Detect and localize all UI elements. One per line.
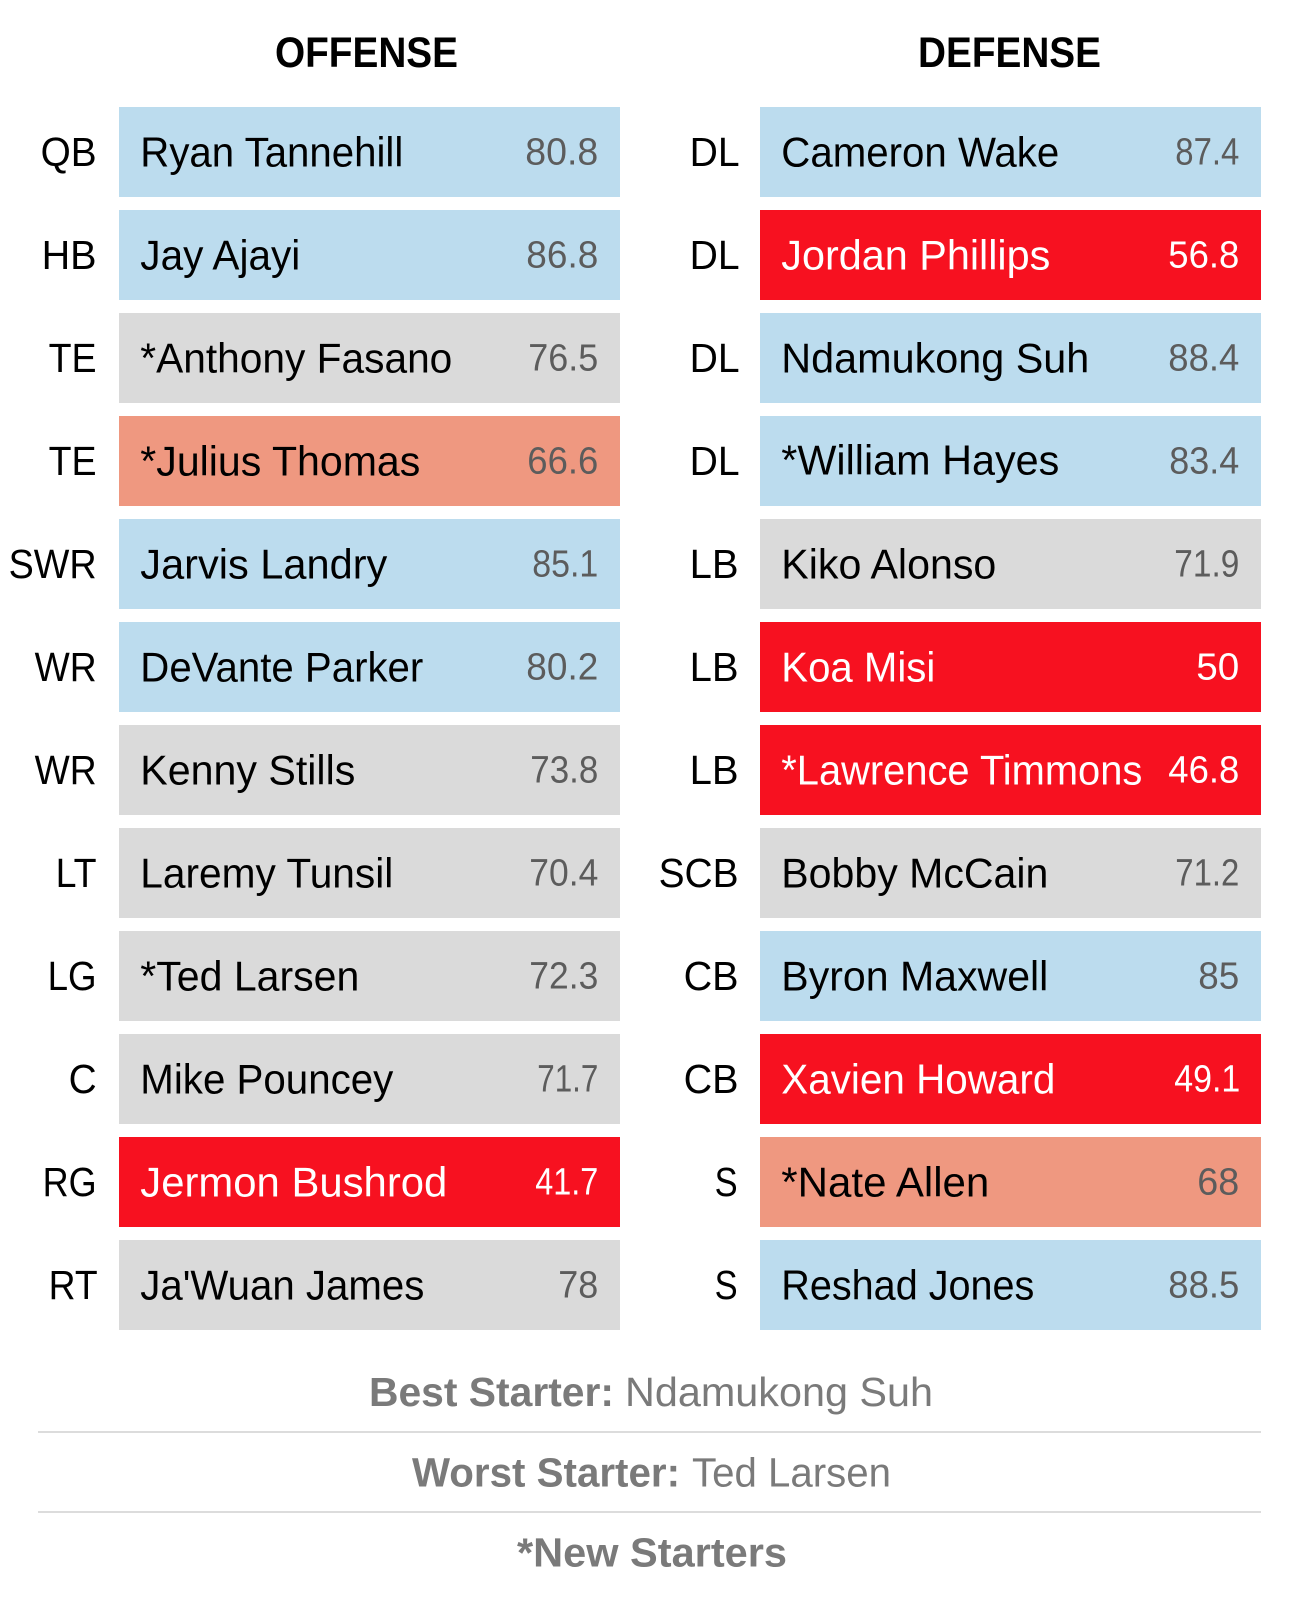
text: worst starter	[412, 1450, 891, 1496]
row: DL Jordan Phillips: 56.8	[1168, 235, 1239, 277]
row: SCB Bobby McCain: Bobby McCain	[781, 850, 1048, 896]
row: RG Jermon Bushrod	[43, 1137, 620, 1227]
row: HB Jay Ajayi	[42, 210, 620, 300]
row: WR Kenny Stills	[35, 725, 620, 815]
row: LB Lawrence Timmons: 46.8	[1168, 750, 1239, 792]
row: LB Koa Misi: Koa Misi	[781, 644, 935, 690]
row: DL Ndamukong Suh: 88.4	[1168, 338, 1239, 380]
row: DL William Hayes	[690, 416, 1261, 506]
row: DL Cameron Wake: Cameron Wake	[781, 128, 1059, 176]
row: LT Laremy Tunsil	[56, 828, 620, 918]
row: S Nate Allen	[715, 1137, 1261, 1227]
row: RT Ja'Wuan James	[49, 1240, 620, 1330]
row: LB Lawrence Timmons	[690, 725, 1261, 815]
row: RG Jermon Bushrod: RG	[43, 1159, 97, 1205]
row: WR DeVante Parker: 80.2	[526, 647, 598, 689]
row: DL William Hayes: *William Hayes	[781, 436, 1059, 484]
row: LB Lawrence Timmons: LB	[690, 747, 739, 793]
row: TE Julius Thomas: *Julius Thomas	[140, 438, 420, 484]
row: RG Jermon Bushrod: Jermon Bushrod	[140, 1158, 447, 1206]
row: LB Koa Misi: LB	[690, 644, 739, 690]
row: DL Jordan Phillips	[690, 210, 1261, 300]
row: S Nate Allen: *Nate Allen	[781, 1158, 989, 1206]
row: DL Jordan Phillips: DL	[690, 232, 740, 278]
row: S Nate Allen: S	[715, 1159, 738, 1205]
heading: offense: OFFENSE	[275, 29, 458, 77]
row: WR DeVante Parker: DeVante Parker	[140, 644, 423, 690]
row: RG Jermon Bushrod: 41.7	[535, 1162, 598, 1204]
row: CB Xavien Howard	[684, 1034, 1261, 1124]
text: worst starter: Worst Starter:	[412, 1450, 680, 1496]
row: C Mike Pouncey: C	[69, 1056, 97, 1102]
row: S Reshad Jones: Reshad Jones	[781, 1262, 1034, 1308]
row: LB Koa Misi	[690, 622, 1261, 712]
row: RT Ja'Wuan James: 78	[558, 1265, 598, 1307]
heading: defense: DEFENSE	[918, 29, 1101, 77]
row: LG Ted Larsen: 72.3	[529, 956, 598, 998]
text: worst starter: Ted Larsen	[692, 1450, 891, 1496]
row: LG Ted Larsen: LG	[48, 953, 97, 999]
row: QB Ryan Tannehill	[41, 107, 620, 197]
row: S Reshad Jones: 88.5	[1168, 1265, 1239, 1307]
row: LT Laremy Tunsil: LT	[56, 850, 97, 896]
row: C Mike Pouncey: 71.7	[537, 1059, 598, 1101]
row: SWR Jarvis Landry: SWR	[9, 541, 97, 587]
row: C Mike Pouncey	[69, 1034, 620, 1124]
panel: offense roster	[9, 107, 620, 1330]
panel: defense roster	[659, 107, 1261, 1330]
row: QB Ryan Tannehill: Ryan Tannehill	[140, 128, 403, 176]
text: best starter: Best Starter:	[369, 1369, 614, 1415]
row: TE Julius Thomas: 66.6	[527, 441, 598, 483]
row: S Nate Allen: 68	[1197, 1162, 1239, 1204]
row: SWR Jarvis Landry	[9, 519, 620, 609]
row: S Reshad Jones	[715, 1240, 1261, 1330]
row: QB Ryan Tannehill: QB	[41, 129, 97, 175]
row: LB Kiko Alonso: LB	[690, 541, 739, 587]
row: CB Byron Maxwell: Byron Maxwell	[781, 952, 1048, 1000]
row: TE Anthony Fasano	[49, 313, 620, 403]
row: CB Xavien Howard: Xavien Howard	[781, 1056, 1055, 1102]
row: DL Ndamukong Suh	[690, 313, 1261, 403]
row: WR DeVante Parker	[35, 622, 620, 712]
row: RT Ja'Wuan James: RT	[49, 1262, 98, 1308]
row: DL Cameron Wake: 87.4	[1175, 132, 1239, 174]
row: LB Kiko Alonso: Kiko Alonso	[781, 540, 996, 588]
row: LB Kiko Alonso: 71.9	[1174, 544, 1239, 586]
row: TE Anthony Fasano: *Anthony Fasano	[140, 334, 452, 382]
row: LG Ted Larsen	[48, 931, 620, 1021]
row: DL William Hayes: 83.4	[1169, 441, 1239, 483]
row: DL Ndamukong Suh: DL	[690, 335, 740, 381]
row: CB Byron Maxwell: CB	[684, 953, 739, 999]
row: TE Julius Thomas: TE	[49, 438, 97, 484]
row: SCB Bobby McCain: 71.2	[1175, 853, 1239, 895]
row: LT Laremy Tunsil: Laremy Tunsil	[140, 850, 393, 896]
row: S Reshad Jones: S	[715, 1262, 738, 1308]
row: DL William Hayes: DL	[690, 438, 740, 484]
row: LG Ted Larsen: *Ted Larsen	[140, 952, 359, 1000]
row: LB Kiko Alonso	[690, 519, 1261, 609]
row: SWR Jarvis Landry: 85.1	[532, 544, 598, 586]
text: best starter	[369, 1369, 933, 1415]
row: DL Jordan Phillips: Jordan Phillips	[781, 232, 1050, 278]
row: C Mike Pouncey: Mike Pouncey	[140, 1056, 393, 1102]
row: QB Ryan Tannehill: 80.8	[525, 132, 598, 174]
row: HB Jay Ajayi: Jay Ajayi	[140, 232, 300, 278]
row: DL Ndamukong Suh: Ndamukong Suh	[781, 334, 1089, 382]
row: CB Xavien Howard: CB	[684, 1056, 739, 1102]
row: SCB Bobby McCain	[659, 828, 1261, 918]
row: TE Anthony Fasano: 76.5	[528, 338, 598, 380]
row: TE Anthony Fasano: TE	[49, 335, 97, 381]
row: WR Kenny Stills: Kenny Stills	[140, 746, 355, 794]
row: CB Byron Maxwell: 85	[1198, 956, 1239, 998]
text: new starters note: *New Starters	[517, 1530, 787, 1576]
row: LB Koa Misi: 50	[1196, 647, 1239, 689]
row: DL Cameron Wake	[690, 107, 1261, 197]
row: HB Jay Ajayi: 86.8	[526, 235, 598, 277]
row: HB Jay Ajayi: HB	[42, 232, 97, 278]
text: best starter: Ndamukong Suh	[625, 1369, 933, 1415]
row: RT Ja'Wuan James: Ja'Wuan James	[140, 1262, 424, 1308]
row: WR DeVante Parker: WR	[35, 644, 97, 690]
row: LT Laremy Tunsil: 70.4	[529, 853, 598, 895]
row: CB Byron Maxwell	[684, 931, 1261, 1021]
row: LB Lawrence Timmons: *Lawrence Timmons	[781, 746, 1142, 794]
row: SCB Bobby McCain: SCB	[659, 850, 739, 896]
row: TE Julius Thomas	[49, 416, 620, 506]
row: DL Cameron Wake: DL	[690, 129, 740, 175]
row: WR Kenny Stills: 73.8	[530, 750, 598, 792]
row: CB Xavien Howard: 49.1	[1174, 1059, 1240, 1101]
row: SWR Jarvis Landry: Jarvis Landry	[140, 540, 387, 588]
row: WR Kenny Stills: WR	[35, 747, 97, 793]
